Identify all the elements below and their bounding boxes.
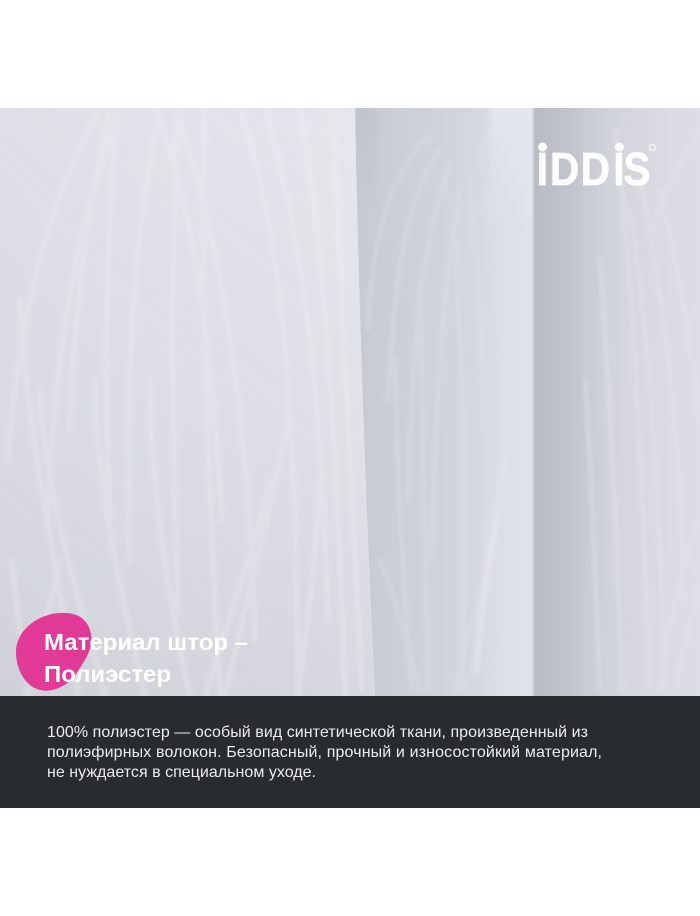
description text: полиэфирных волокон. Безопасный, прочный и износостойкий материал, — [47, 744, 602, 761]
logo: IDDIS: IDDIS — [537, 145, 650, 196]
heading: Материал штор – — [44, 629, 248, 655]
logo registered mark — [650, 144, 656, 150]
pink accent blob — [16, 613, 92, 691]
curtain fold: left — [0, 108, 380, 696]
description text: 100% полиэстер — особый вид синтетической ткани, произведенный из — [47, 724, 588, 741]
description text: не нуждается в специальном уходе. — [47, 764, 316, 781]
heading: Полиэстер — [44, 661, 171, 687]
description text — [47, 724, 602, 781]
curtain fold: right — [532, 108, 700, 696]
curtain fold: middle — [350, 100, 540, 696]
heading — [44, 629, 248, 687]
curtain photo — [0, 100, 700, 696]
logo dots — [538, 142, 624, 152]
infographic canvas — [0, 108, 700, 808]
dark description band — [0, 696, 700, 808]
